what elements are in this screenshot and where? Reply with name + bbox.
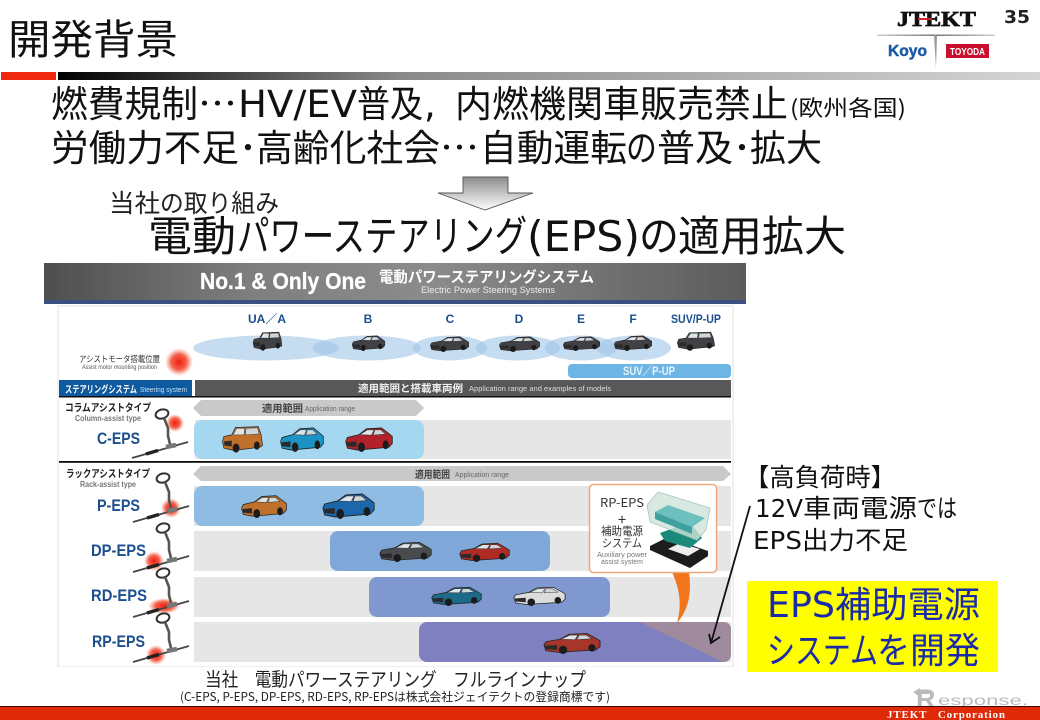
- rack assist header: 適用範囲: [415, 466, 450, 481]
- note: high load: EPS: [753, 526, 802, 555]
- panel: EPS lineup: [44, 263, 746, 667]
- callout: auxiliary power system: assist system: [601, 559, 643, 566]
- callout: auxiliary power system: システム: [602, 535, 642, 551]
- company logo: JTEKT: [897, 7, 976, 31]
- table header row: Steering system: [140, 387, 187, 394]
- callout: development of EPS auxiliary power: 開発: [910, 622, 980, 674]
- row: P-EPS: P-EPS: [97, 496, 140, 515]
- row: C-EPS: [65, 400, 731, 459]
- row: C-EPS: C-EPS: [97, 429, 140, 448]
- row: RP-EPS: RP-EPS: [92, 632, 145, 651]
- line: labor shortage: の: [626, 118, 657, 172]
- background text block: [51, 74, 906, 172]
- watermark: esponse.: [938, 692, 1028, 708]
- vehicle class ellipses: [193, 312, 721, 360]
- line: fuel regulation: 内燃機関車販売禁止: [455, 74, 788, 128]
- row: P-EPS: [97, 472, 731, 526]
- rack assist header: Application range: [455, 472, 509, 479]
- row: DP-EPS: DP-EPS: [91, 541, 146, 560]
- line: fuel regulation: ,: [424, 83, 436, 126]
- table header row: Application range and examples of models: [469, 386, 612, 393]
- line: fuel regulation: 普及: [357, 74, 423, 128]
- arrow: down: [438, 177, 533, 210]
- panel header: No.1 & Only One: [200, 268, 366, 294]
- vehicle class ellipses: F: [629, 312, 637, 326]
- heading: EPS expansion: の: [639, 203, 679, 264]
- callout: auxiliary power system: Auxiliary power: [597, 552, 648, 559]
- panel header: [44, 263, 746, 304]
- line: labor shortage: ･: [733, 118, 751, 172]
- line: fuel regulation note: (欧州各国): [790, 91, 906, 123]
- row: RP-EPS: [92, 612, 731, 665]
- title: 開発背景: [8, 6, 178, 66]
- vehicle class ellipses: B: [364, 312, 373, 326]
- callout: auxiliary power system: 補助電源: [601, 523, 643, 539]
- callout: auxiliary power system: RP-EPS: [600, 494, 644, 511]
- company logo: Koyo: [888, 43, 927, 60]
- gradient title rule: [58, 72, 1040, 80]
- label: our initiatives: [109, 184, 279, 220]
- SUV P-UP bar: SUV／P-UP: [623, 364, 675, 378]
- row: C-EPS: Application range: [305, 406, 355, 413]
- line: fuel regulation: 燃費規制: [51, 74, 198, 128]
- red title rule: [1, 72, 56, 80]
- assist motor legend: Assist motor mounting position: [82, 365, 157, 371]
- table header row: ステアリングシステム: [65, 381, 137, 396]
- vehicle class ellipses: E: [577, 312, 585, 326]
- heading: EPS expansion: (EPS): [527, 212, 640, 261]
- vehicle class ellipses: SUV/P-UP: [671, 312, 721, 326]
- vehicle class ellipses: UA／A: [248, 312, 286, 326]
- line: labor shortage: 拡大: [750, 118, 822, 172]
- rack assist header: ラックアシストタイプ: [66, 466, 150, 481]
- row: C-EPS: Column-assist type: [75, 414, 141, 423]
- row: DP-EPS: [91, 522, 731, 572]
- panel header: Electric Power Steering Systems: [421, 285, 556, 295]
- footer: [0, 706, 1040, 720]
- note: high load: では: [917, 489, 957, 525]
- table header row: [59, 380, 731, 398]
- row: RD-EPS: [91, 567, 731, 617]
- callout: auxiliary power system: +: [618, 509, 626, 530]
- line: labor shortage: …: [440, 118, 479, 172]
- line: fuel regulation: [51, 74, 788, 128]
- table header row: 適用範囲と搭載車両例: [358, 380, 463, 395]
- panel background: [58, 306, 733, 667]
- line: labor shortage: 自動運転: [480, 118, 627, 172]
- label: our initiatives: 当社: [109, 184, 160, 220]
- SUV P-UP bar: [568, 364, 731, 378]
- row: C-EPS: コラムアシストタイプ: [65, 400, 151, 415]
- note: high load: 出力不足: [802, 521, 908, 557]
- vehicle class ellipses: D: [515, 312, 524, 326]
- watermark: R: [916, 684, 936, 714]
- line: labor shortage: 普及: [657, 118, 733, 172]
- panel header: 電動パワーステアリングシステム: [379, 266, 594, 287]
- line: fuel regulation: …: [198, 74, 237, 128]
- page number: 35: [1004, 7, 1030, 28]
- vehicle class ellipses: C: [446, 312, 455, 326]
- callout: development of EPS auxiliary power: [747, 576, 998, 674]
- callout: auxiliary power system: [590, 484, 716, 623]
- rack assist header: Rack-assist type: [80, 480, 136, 489]
- note: high load: 12V: [755, 494, 803, 523]
- assist motor legend: [79, 348, 193, 376]
- heading: EPS expansion: 適用拡大: [678, 203, 846, 264]
- caption: full lineup: 当社 電動パワーステアリング フルラインナップ: [205, 665, 586, 692]
- assist motor legend: アシストモータ搭載位置: [79, 353, 160, 365]
- heading: EPS expansion: パワーステアリング: [237, 203, 527, 264]
- line: labor shortage: 労働力不足: [51, 118, 239, 172]
- rack assist header: [66, 466, 731, 489]
- note: high load: 【高負荷時】: [744, 458, 896, 494]
- company logo: TOYODA: [950, 47, 985, 58]
- row: C-EPS: 適用範囲: [262, 400, 303, 415]
- callout: development of EPS auxiliary power: 補助電源: [835, 576, 980, 628]
- icon: power unit: [647, 492, 710, 568]
- line: fuel regulation: HV/EV: [238, 83, 357, 126]
- note: high load: [744, 458, 957, 557]
- row: RD-EPS: RD-EPS: [91, 586, 147, 605]
- note: high load: 車両電源: [803, 489, 917, 525]
- line: labor shortage: 高齢化社会: [256, 118, 440, 172]
- watermark: [913, 684, 1028, 714]
- heading: EPS expansion: 電動: [148, 203, 236, 264]
- line: labor shortage: ･: [239, 118, 257, 172]
- callout: development of EPS auxiliary power: を: [877, 622, 910, 674]
- callout: development of EPS auxiliary power: システム: [767, 622, 878, 674]
- company logo: [877, 7, 995, 68]
- caption: trademark note: (C-EPS, P-EPS, DP-EPS, RD-EPS, RP-EPSは株式会社ジェイテクトの登録商標です): [180, 688, 610, 705]
- arrow: note to RP-EPS: [709, 506, 750, 643]
- line: labor shortage: [51, 118, 822, 172]
- heading: EPS expansion: [148, 203, 846, 264]
- label: our initiatives: の取り組み: [160, 184, 279, 220]
- callout: development of EPS auxiliary power: EPS: [767, 585, 835, 626]
